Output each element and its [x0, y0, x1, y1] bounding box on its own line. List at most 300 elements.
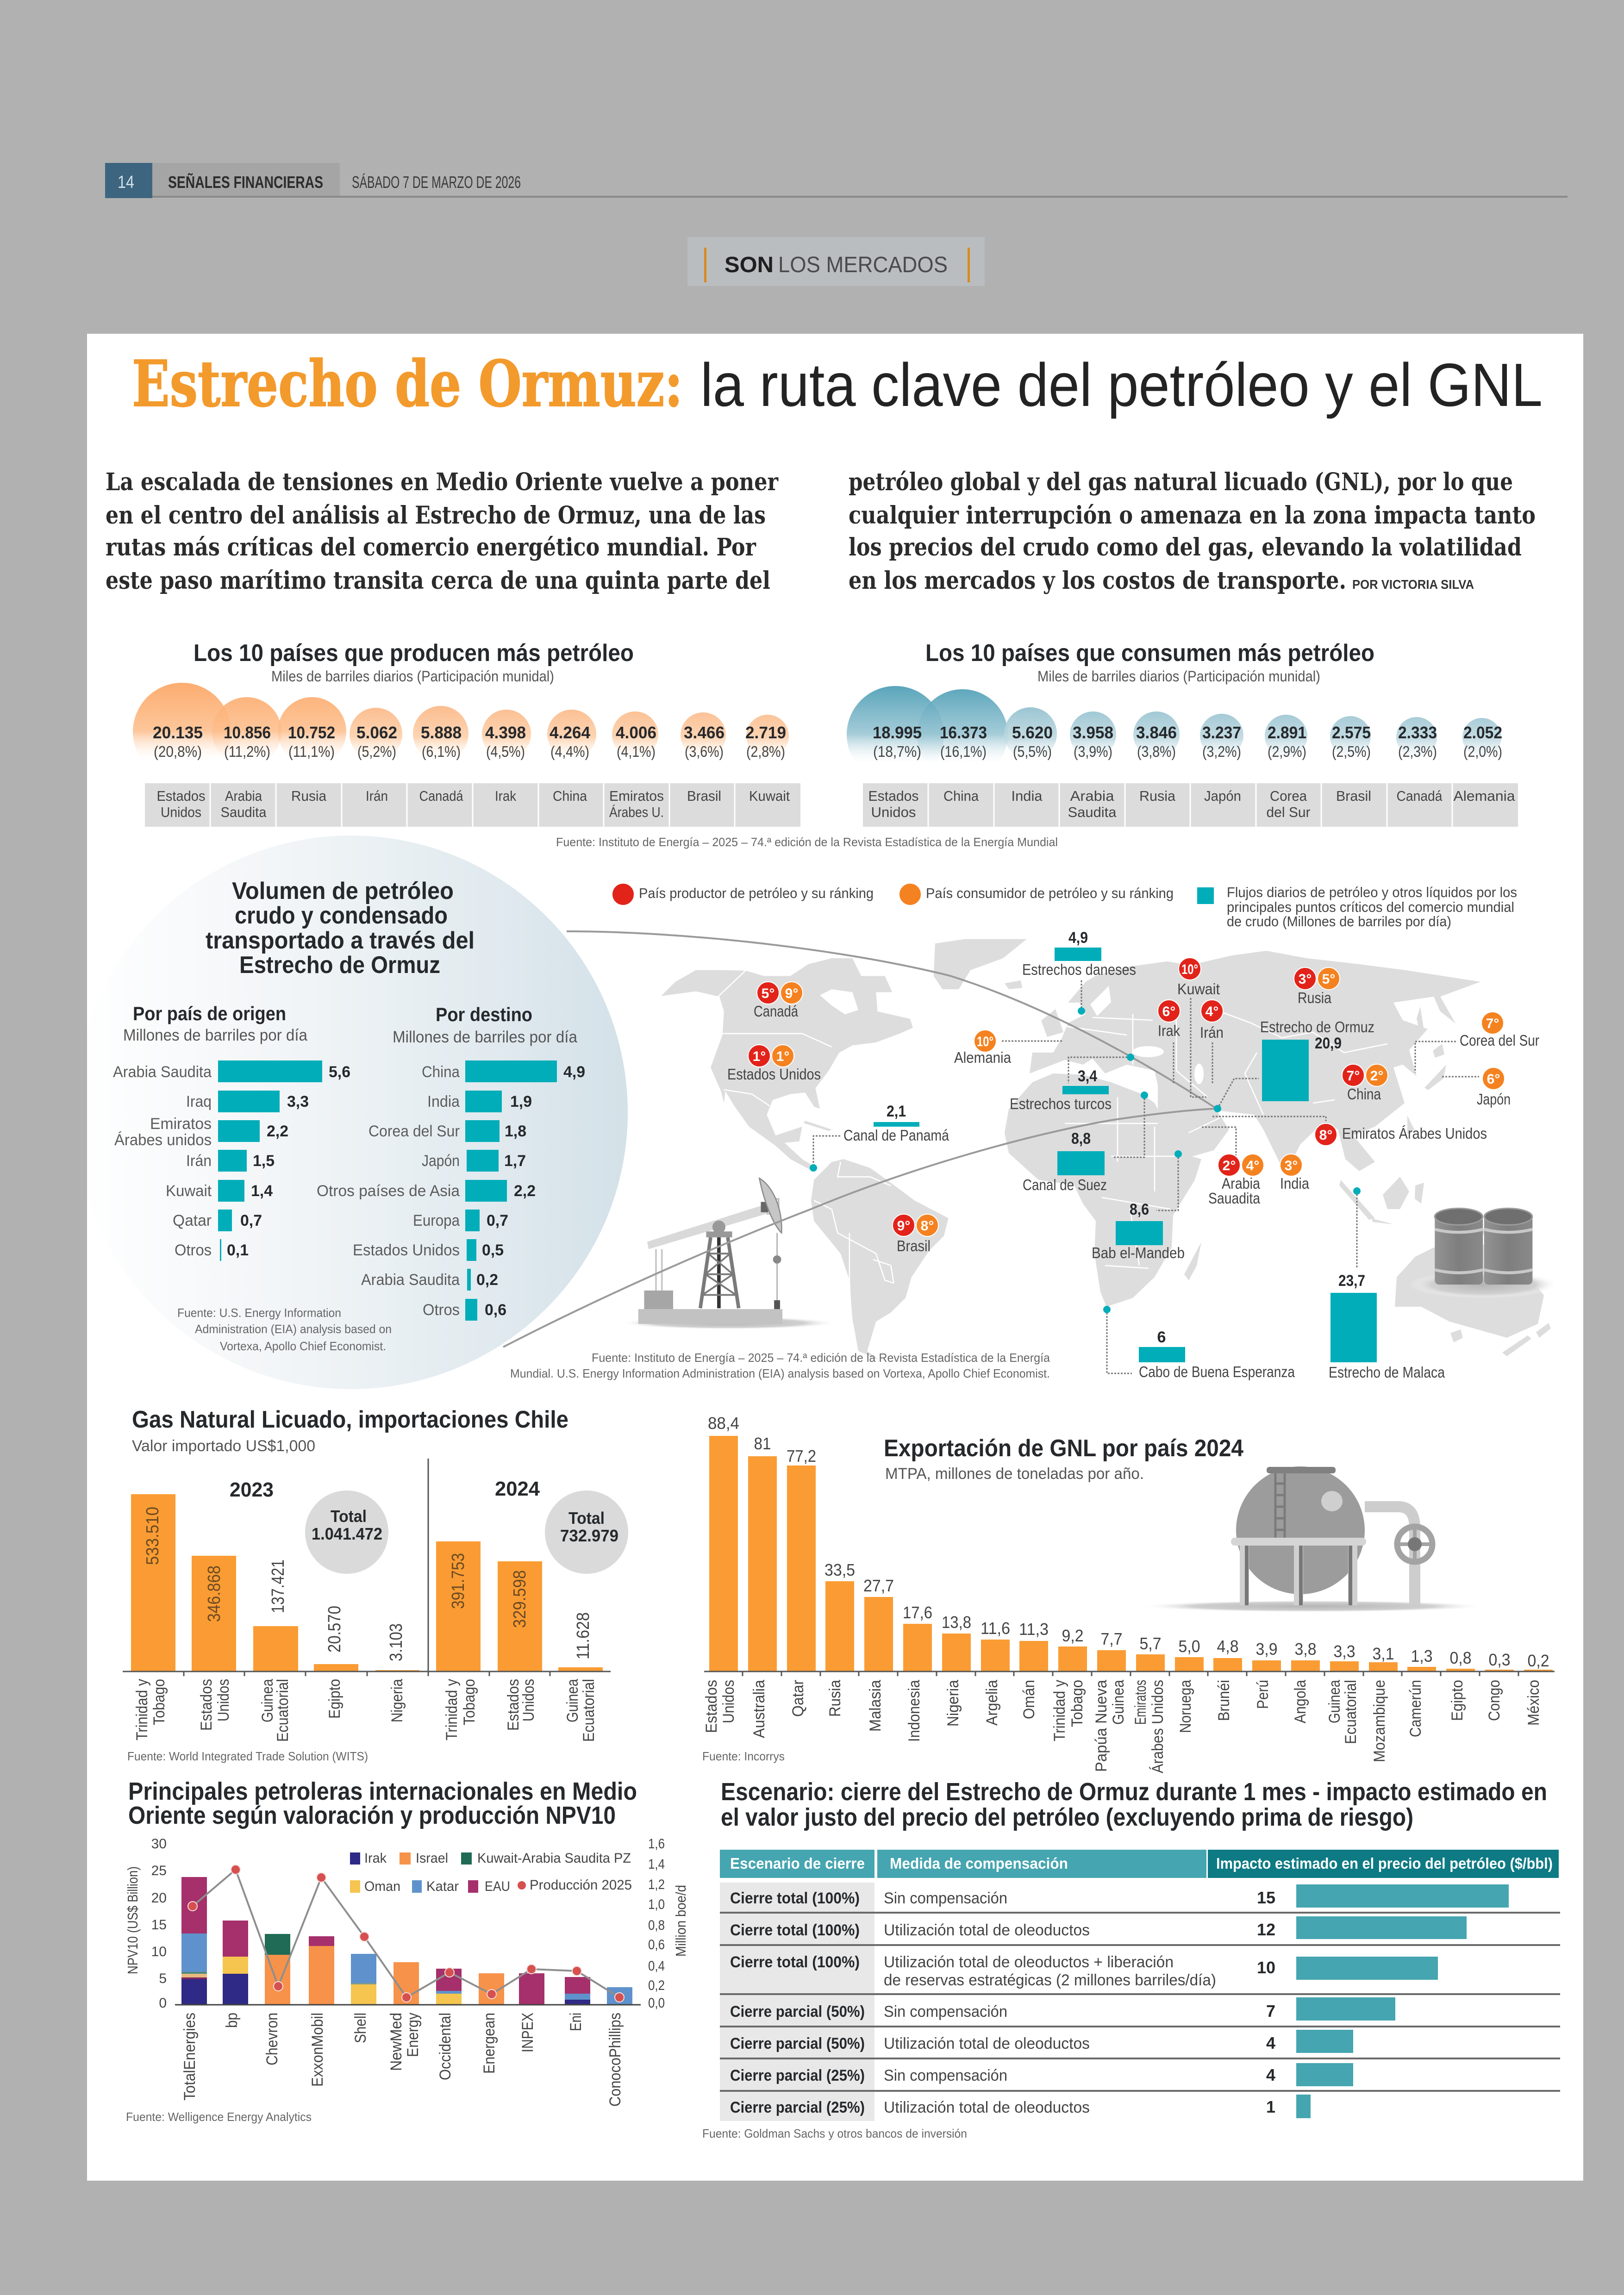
values: consumers: 3.958 [1073, 723, 1113, 742]
bar chart: imports by year: Trinidad y [133, 1679, 151, 1740]
bar chart: imports by year: Unidos [520, 1679, 537, 1721]
rank: Rusia: 5° [1322, 972, 1335, 987]
bar chart: exports: 17,6 [903, 1603, 932, 1622]
values: producers: (4,5%) [486, 743, 525, 760]
bar chart: exports: 33,5 [824, 1560, 855, 1579]
rank: Canadá: Canadá [754, 1003, 799, 1020]
values: consumers: (2,9%) [1268, 743, 1306, 760]
values: producers: 3.466 [684, 723, 725, 742]
company axis labels: Energean [481, 2013, 498, 2074]
icon: oil pumpjack [619, 1178, 837, 1329]
bar chart: exports: Perú [1254, 1680, 1272, 1709]
rank: Kuwait [1177, 958, 1220, 998]
rank: Japón [1477, 1067, 1511, 1108]
country strip: producers: Árabes U. [609, 804, 664, 820]
axes: NPV10 and production: 1,4 [648, 1857, 665, 1872]
bar chart: exports: 5,7 [1140, 1634, 1161, 1653]
values: producers: 2.719 [745, 723, 786, 742]
chart legend: Oman [364, 1879, 400, 1894]
company axis labels: NewMed [387, 2013, 405, 2071]
panel: closure scenario table [702, 1778, 1560, 2140]
chart legend: Irak [364, 1851, 387, 1866]
rank: Irán: Irán [1200, 1024, 1224, 1041]
rank: Irán [1200, 1000, 1224, 1041]
bar chart: imports by year: Tobago [150, 1679, 168, 1725]
map legend [612, 883, 1517, 929]
intro text block: los precios del crudo como del gas, elevando la volatilidad [849, 533, 1522, 561]
bar chart: by origin: 3,3 [287, 1093, 309, 1110]
values: producers: 10.752 [288, 723, 335, 742]
heading: LNG exports: Exportación de GNL por país 2024 [884, 1435, 1243, 1462]
intro text block: rutas más críticas del comercio energético mundial. Por [106, 533, 756, 561]
table rows: Cierre parcial (25%) [730, 2067, 865, 2084]
rank: India: 3° [1285, 1158, 1298, 1173]
bar chart: exports: 9,2 [1062, 1626, 1083, 1645]
table rows: Utilización total de oleoductos + liberación [884, 1953, 1174, 1971]
intro text block: en el centro del análisis al Estrecho de Ormuz, una de las [106, 501, 766, 530]
bar chart: by destination: India [427, 1093, 460, 1110]
bar chart: imports by year: 3.103 [387, 1623, 406, 1661]
table rows: 7 [1266, 2002, 1275, 2021]
values: producers: (11,1%) [288, 743, 335, 760]
axes: NPV10 and production: 0,0 [648, 1996, 665, 2011]
country strip: consumers: Estados [868, 788, 918, 804]
rank: Irak: 6° [1162, 1004, 1175, 1019]
source: energy institute: Fuente: Instituto de Energía – 2025 – 74.ª edición de la Revista Estadística de la Energía Mundial [556, 835, 1058, 849]
country strip: consumers: Japón [1204, 788, 1241, 804]
bar chart: imports by year: Ecuatorial [580, 1679, 598, 1742]
bar chart: imports by year: Guinea [564, 1679, 581, 1722]
bar chart: by destination: 1,7 [504, 1152, 526, 1170]
country strip: consumers: China [943, 788, 979, 804]
chokepoint: Canal de Suez: Canal de Suez [1023, 1176, 1107, 1193]
values: consumers: 3.846 [1136, 723, 1177, 742]
company axis labels: Energy [404, 2013, 422, 2057]
country strip: producers: Saudita [220, 804, 267, 820]
rank: Alemania: Alemania [954, 1049, 1012, 1066]
newspaper header strip: SÁBADO 7 DE MARZO DE 2026 [352, 173, 521, 192]
subheading: LNG imports: Valor importado US$1,000 [132, 1437, 315, 1455]
intro text block: POR VICTORIA SILVA [1352, 577, 1474, 592]
subheading: producers: Miles de barriles diarios (Participación munidal) [271, 668, 554, 685]
panel: LNG imports Chile [123, 1406, 628, 1763]
bar chart: exports: Ecuatorial [1342, 1680, 1360, 1744]
values: producers: (3,6%) [685, 743, 724, 760]
rank: Canadá: 5° [762, 986, 775, 1001]
bar chart: imports by year: Trinidad y [443, 1679, 461, 1740]
bar chart: imports by year: 2024 [495, 1478, 540, 1500]
bar chart: exports: 3,9 [1255, 1640, 1278, 1659]
table rows: Utilización total de oleoductos [884, 1921, 1090, 1939]
bar chart: imports by year [123, 1459, 611, 1742]
company axis labels: TotalEnergies [181, 2013, 199, 2101]
chokepoint: Bab el-Mandeb: Bab el-Mandeb [1092, 1244, 1185, 1261]
values: producers: (6,1%) [422, 743, 461, 760]
values: producers: 5.888 [421, 723, 462, 742]
country strip: consumers [863, 783, 1518, 827]
continents: Americas [661, 939, 1027, 1360]
values: producers: (4,4%) [550, 743, 589, 760]
company axis labels: Chevron [263, 2013, 281, 2065]
rank: Brasil: Brasil [897, 1237, 931, 1254]
company axis labels [181, 2013, 624, 2107]
bar chart: imports by year: 20.570 [325, 1606, 344, 1653]
heading: oil companies: Oriente según valoración y producción NPV10 [128, 1802, 616, 1829]
country strip: consumers: Canadá [1396, 788, 1443, 804]
country strip: consumers: Rusia [1139, 788, 1176, 804]
source: map: Fuente: Instituto de Energía – 2025 – 74.ª edición de la Revista Estadística de la Energía [592, 1351, 1050, 1365]
source: Goldman Sachs: Fuente: Goldman Sachs y otros bancos de inversión [702, 2127, 967, 2140]
heading: producers: Los 10 países que producen más petróleo [194, 640, 634, 667]
axes: NPV10 and production: Million boe/d [673, 1885, 689, 1957]
bar chart: by origin: Otros [175, 1241, 212, 1259]
source: Welligence: Fuente: Welligence Energy Analytics [126, 2110, 312, 2124]
chokepoint: Canal de Panamá: 2,1 [887, 1103, 906, 1120]
bar chart: imports by year: 137.421 [269, 1559, 288, 1613]
bar chart: exports: Congo [1486, 1680, 1503, 1721]
bar chart: exports: Noruega [1177, 1680, 1194, 1733]
country strip: producers: Emiratos [609, 788, 664, 804]
bubbles: producers [133, 683, 789, 781]
bar chart: exports: Indonesia [906, 1680, 923, 1742]
map connector lines [813, 980, 1479, 1373]
bar chart: by destination: Corea del Sur [369, 1123, 460, 1140]
table rows: Sin compensación [884, 1890, 1007, 1907]
chokepoint: Estrechos turcos: 3,4 [1078, 1067, 1097, 1085]
chokepoint: Estrechos turcos [1010, 1054, 1134, 1112]
axes: NPV10 and production: NPV10 (US$ Billion) [125, 1866, 141, 1974]
country strip: consumers: Unidos [871, 804, 916, 820]
bar chart: by destination: Japón [422, 1152, 460, 1170]
heading: scenario: Escenario: cierre del Estrecho de Ormuz durante 1 mes - impacto estimado en [721, 1778, 1547, 1806]
chokepoint: Canal de Suez: 8,8 [1071, 1130, 1091, 1148]
rank: Estados Unidos: Estados Unidos [727, 1066, 821, 1083]
country strip: consumers: Arabia [1070, 788, 1114, 804]
chokepoint: Cabo de Buena Esperanza: 6 [1157, 1328, 1166, 1346]
values: producers: (11,2%) [224, 743, 270, 760]
bar chart: by origin [113, 1003, 350, 1261]
rank: China: China [1347, 1085, 1381, 1103]
bar chart: exports: Camerún [1407, 1680, 1424, 1737]
title: la ruta clave del petróleo y el GNL [700, 351, 1543, 419]
rank: Estados Unidos: 1° [776, 1049, 789, 1064]
rank: China [1342, 1064, 1388, 1103]
rank: Rusia: 3° [1299, 972, 1312, 987]
table rows: Cierre parcial (50%) [730, 2035, 865, 2052]
table header: Impacto estimado en el precio del petróleo ($/bbl) [1216, 1855, 1553, 1872]
callout: total 2023 [305, 1491, 388, 1574]
values: producers: (4,1%) [617, 743, 656, 760]
bar chart: exports: 27,7 [863, 1576, 894, 1595]
country strip: consumers: del Sur [1267, 804, 1310, 820]
heading: volume [206, 878, 475, 979]
bar chart: by destination [317, 1004, 585, 1321]
values: consumers: 18.995 [873, 723, 922, 742]
country strip: producers: Irán [366, 788, 388, 804]
company axis labels: ConocoPhillips [606, 2013, 624, 2107]
heading: volume: Volumen de petróleo [232, 878, 454, 904]
rank: Alemania [954, 1030, 1012, 1066]
bar chart: by destination: 0,6 [485, 1301, 506, 1319]
company axis labels: bp [223, 2013, 241, 2028]
bar chart: exports: Malasia [867, 1680, 884, 1732]
chokepoint: Estrechos turcos: Estrechos turcos [1010, 1095, 1112, 1112]
bar chart: by destination: Arabia Saudita [361, 1271, 460, 1289]
values: consumers: 2.333 [1398, 723, 1437, 742]
bar chart: exports: 0,2 [1528, 1651, 1549, 1670]
rank: Estados Unidos: 1° [753, 1049, 766, 1064]
callout: total 2024: Total [568, 1509, 605, 1528]
newspaper header strip [105, 163, 1568, 198]
axes: NPV10 and production: 20 [151, 1890, 167, 1906]
subheading: LNG exports: MTPA, millones de toneladas por año. [885, 1465, 1144, 1483]
company axis labels: Shell [352, 2013, 369, 2043]
bar chart: by origin: 1,5 [253, 1152, 275, 1170]
panel: LNG exports by country [702, 1414, 1555, 1773]
values: consumers: (16,1%) [940, 743, 987, 760]
map legend: principales puntos críticos del comercio mundial [1227, 899, 1514, 915]
source: EIA in circle: Administration (EIA) analysis based on [195, 1322, 392, 1336]
values: producers: (5,2%) [357, 743, 396, 760]
axes: NPV10 and production: 1,2 [648, 1877, 665, 1892]
rank: India: India [1280, 1175, 1310, 1192]
bar chart: exports: 3,8 [1294, 1640, 1317, 1659]
bar chart: exports: 4,8 [1217, 1637, 1239, 1656]
rank: Emiratos Árabes Unidos [1315, 1123, 1487, 1146]
axes: NPV10 and production: 0,8 [648, 1918, 665, 1933]
bar chart: imports by year: Unidos [215, 1679, 232, 1721]
map legend: País consumidor de petróleo y su ránking [926, 885, 1174, 901]
bar chart: exports: México [1525, 1680, 1543, 1726]
values: consumers: (2,5%) [1332, 743, 1371, 760]
country strip: consumers: Alemania [1454, 788, 1515, 804]
values: consumers: (3,9%) [1074, 743, 1112, 760]
bar chart: exports: 3,3 [1333, 1642, 1355, 1661]
table rows: Sin compensación [884, 2003, 1007, 2021]
chokepoint: Estrechos daneses: 4,9 [1068, 929, 1088, 947]
callout: total 2023: Total [331, 1507, 367, 1526]
country strip: producers: Arabia [225, 788, 262, 804]
rank: Rusia: Rusia [1298, 989, 1332, 1006]
map legend: de crudo (Millones de barriles por día) [1227, 913, 1451, 929]
circle background [204, 836, 628, 1389]
bar chart: exports: Argelia [983, 1680, 1001, 1726]
intro text block [106, 468, 1536, 595]
chokepoint: Cabo de Buena Esperanza [1103, 1306, 1295, 1380]
heading: oil companies: Principales petroleras internacionales en Medio [128, 1777, 637, 1805]
intro text block: este paso marítimo transita cerca de una quinta parte del [106, 567, 770, 595]
values: consumers: (18,7%) [873, 743, 921, 760]
world map [619, 939, 1558, 1360]
bar chart: exports: Guinea [1326, 1680, 1343, 1723]
rank: Brasil [893, 1214, 938, 1254]
bar chart: by origin: Millones de barriles por día [123, 1026, 307, 1044]
chokepoint: Bab el-Mandeb: 8,6 [1130, 1201, 1149, 1218]
heading: LNG imports: Gas Natural Licuado, importaciones Chile [132, 1406, 568, 1433]
rank: Irak: Irak [1158, 1022, 1180, 1039]
values: consumers: 16.373 [940, 723, 987, 742]
chokepoint: Estrechos daneses [1022, 929, 1136, 1015]
rank: Brasil: 9° [897, 1218, 910, 1234]
shipping route arcs [503, 931, 1217, 1347]
rank: India [1280, 1154, 1310, 1192]
values: producers: 4.264 [550, 723, 590, 742]
chart legend: Israel [416, 1851, 448, 1866]
chokepoint: Cabo de Buena Esperanza: Cabo de Buena Esperanza [1139, 1363, 1295, 1380]
bar chart: by destination: China [422, 1063, 460, 1081]
values: consumers: 2.052 [1463, 723, 1502, 742]
axes: NPV10 and production [125, 1836, 689, 2011]
country strip: producers: Brasil [687, 788, 721, 804]
bar chart: by destination: 0,7 [487, 1212, 508, 1229]
icon: LNG tank [1139, 1466, 1487, 1612]
rank: Arabia Saudita: 4° [1246, 1158, 1259, 1173]
table rows: 12 [1257, 1920, 1275, 1939]
bar chart: imports by year: Guinea [259, 1679, 276, 1722]
rank: Japón: Japón [1477, 1091, 1511, 1108]
axes: NPV10 and production: 5 [159, 1971, 167, 1986]
table rows: 4 [1266, 2033, 1275, 2052]
table rows: Cierre parcial (25%) [730, 2099, 865, 2116]
newspaper header strip: 14 [118, 173, 134, 192]
country strip: consumers: Corea [1270, 788, 1307, 804]
bar chart: exports: 11,6 [981, 1619, 1010, 1638]
chokepoint: Canal de Suez [1023, 1091, 1148, 1193]
rank: Irán: 4° [1206, 1004, 1218, 1019]
bar chart: by destination: Millones de barriles por día [393, 1028, 577, 1046]
values: consumers: (2,0%) [1463, 743, 1502, 760]
bar chart: by origin: Por país de origen [133, 1003, 286, 1024]
bar chart: exports: Rusia [826, 1680, 844, 1717]
chokepoint: Estrecho de Ormuz: 20,9 [1315, 1035, 1342, 1052]
table rows [720, 1883, 1560, 2121]
callout: total 2024: 732.979 [560, 1526, 618, 1545]
bar chart: exports: 0,8 [1450, 1648, 1471, 1667]
rank: Corea del Sur: Corea del Sur [1460, 1032, 1539, 1049]
table rows: 4 [1266, 2065, 1275, 2084]
axes: NPV10 and production: 25 [151, 1863, 167, 1878]
chokepoint: Canal de Panamá: Canal de Panamá [843, 1127, 949, 1144]
bar chart: exports: 77,2 [787, 1447, 816, 1466]
bar chart: exports: Guinea [1110, 1680, 1127, 1725]
bar chart: exports: Australia [750, 1680, 768, 1738]
source: map [510, 1351, 1050, 1380]
rank: Estados Unidos [727, 1045, 821, 1083]
rank: Brasil: 8° [921, 1218, 934, 1234]
heading: scenario [721, 1778, 1547, 1831]
rank: Canadá: 9° [785, 986, 798, 1001]
bar chart: exports: Trinidad y [1051, 1680, 1068, 1741]
rank: China: 2° [1370, 1068, 1383, 1084]
callout: total 2023: 1.041.472 [312, 1524, 382, 1543]
bar chart: exports: 5,0 [1179, 1637, 1200, 1656]
bar chart: exports: Tobago [1068, 1680, 1086, 1727]
axes: NPV10 and production: 10 [151, 1944, 167, 1959]
bar chart: by origin: Irán [186, 1152, 212, 1170]
bar chart: exports [703, 1414, 1555, 1773]
rank: Kuwait: 10° [1181, 962, 1198, 977]
bar chart: by destination: Por destino [436, 1004, 532, 1025]
rank: Arabia Saudita: Sauadita [1208, 1190, 1261, 1207]
bar chart: exports: Emiratos [1132, 1680, 1149, 1725]
bar chart: exports: 11,3 [1019, 1620, 1049, 1639]
values: consumers [873, 723, 1502, 760]
section tag: son los mercados [687, 237, 985, 286]
bar chart: exports: Egipto [1449, 1680, 1466, 1721]
table rows: Cierre parcial (50%) [730, 2003, 865, 2021]
bar chart: exports: Unidos [720, 1680, 737, 1723]
icon: oil barrels [1409, 1209, 1558, 1298]
table rows: 10 [1257, 1958, 1275, 1977]
table rows: 1 [1266, 2097, 1275, 2116]
country strip: producers: Canadá [419, 788, 463, 804]
bar chart: exports: 7,7 [1101, 1629, 1122, 1648]
bar chart: exports: 88,4 [708, 1414, 739, 1433]
table header: Escenario de cierre [730, 1855, 865, 1872]
country strip: producers: Rusia [291, 788, 327, 804]
heading: scenario: el valor justo del precio del petróleo (excluyendo prima de riesgo) [721, 1803, 1413, 1831]
bar chart: imports by year: 391.753 [449, 1553, 468, 1609]
bar chart: imports by year: 329.598 [510, 1570, 530, 1628]
values: producers: 20.135 [153, 723, 203, 742]
values: producers: (20,8%) [154, 743, 202, 760]
bar chart: by origin: Árabes unidos [114, 1131, 212, 1149]
bar chart: by origin: Kuwait [166, 1182, 212, 1200]
panel: international oil companies [125, 1777, 689, 2124]
values: producers [153, 723, 786, 760]
country strip: producers: Unidos [161, 804, 201, 820]
chart legend: EAU [485, 1879, 510, 1894]
company axis labels: Occidental [437, 2013, 454, 2080]
source: EIA in circle: Fuente: U.S. Energy Information [177, 1306, 341, 1320]
values: producers: 10.856 [224, 723, 271, 742]
company axis labels: Eni [567, 2013, 585, 2031]
axes: NPV10 and production: 0,4 [648, 1958, 665, 1974]
bar chart: imports by year: Ecuatorial [274, 1679, 292, 1742]
rank: Corea del Sur [1460, 1012, 1539, 1049]
section tag: son los mercados: SON [725, 253, 774, 277]
chokepoint: Canal de Panamá [810, 1103, 949, 1172]
bar chart: exports: 81 [754, 1434, 771, 1453]
bar chart: by destination: Otros países de Asia [317, 1182, 460, 1200]
axes: NPV10 and production: 30 [151, 1836, 167, 1852]
axes: NPV10 and production: 1,0 [648, 1897, 665, 1912]
values: consumers: 2.891 [1268, 723, 1306, 742]
values: consumers: 2.575 [1332, 723, 1371, 742]
source: map: Mundial. U.S. Energy Information Administration (EIA) analysis based on Vortexa, Apollo Chief Economist. [510, 1366, 1050, 1380]
title [132, 347, 1543, 421]
country strip: producers: China [553, 788, 587, 804]
values: consumers: (5,5%) [1013, 743, 1052, 760]
bar chart: by origin: Iraq [186, 1093, 212, 1110]
table rows: Utilización total de oleoductos [884, 2035, 1090, 2052]
values: consumers: (3,8%) [1137, 743, 1176, 760]
axes: NPV10 and production: 15 [151, 1917, 167, 1933]
table rows: Sin compensación [884, 2067, 1007, 2084]
bar chart: imports by year: Estados [505, 1679, 522, 1731]
bar chart: by destination: 0,5 [482, 1241, 504, 1259]
country strip: producers: Estados [156, 788, 206, 804]
chokepoint: Estrecho de Malaca: 23,7 [1338, 1272, 1365, 1290]
bar chart: exports: 0,3 [1489, 1650, 1510, 1669]
bar chart: imports by year: Nigeria [388, 1679, 406, 1722]
bar chart: by destination: 4,9 [563, 1063, 585, 1081]
table rows: Cierre total (100%) [730, 1953, 860, 1971]
axes: NPV10 and production: 0,2 [648, 1978, 665, 1993]
bar chart: exports: 13,8 [942, 1613, 971, 1632]
table rows: Cierre total (100%) [730, 1921, 860, 1939]
bar chart: exports: 3,1 [1372, 1644, 1394, 1663]
